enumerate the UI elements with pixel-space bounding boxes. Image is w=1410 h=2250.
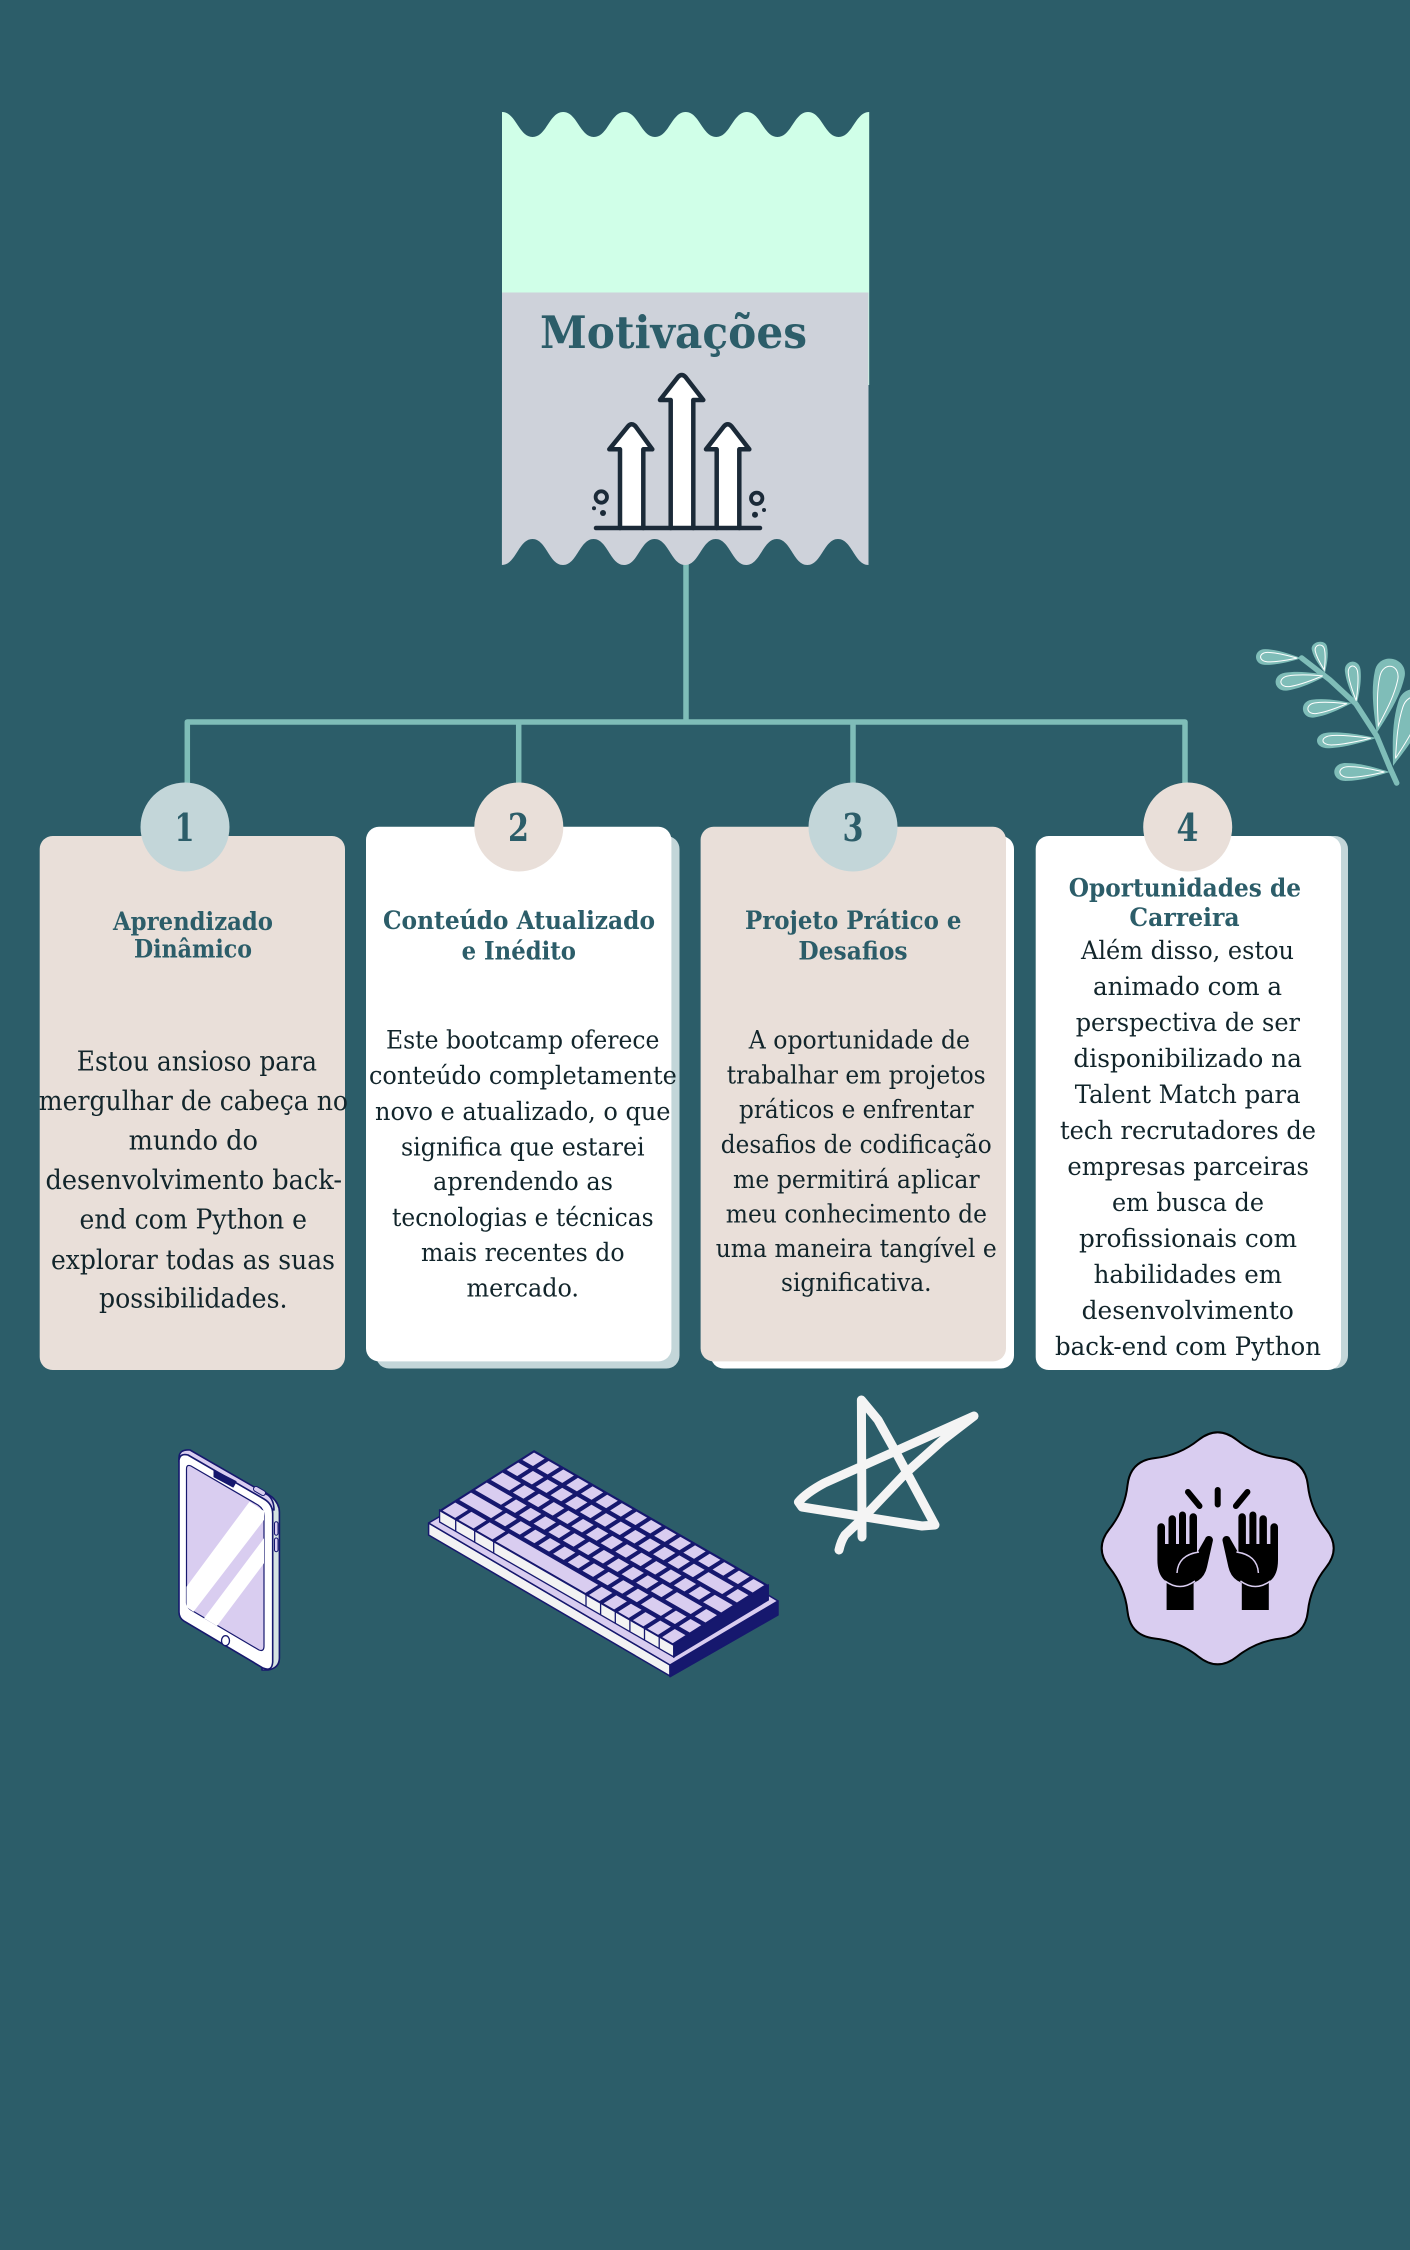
number: 4 [1176, 805, 1198, 850]
body text: desenvolvimento [1082, 1296, 1294, 1325]
base plate [429, 1458, 778, 1677]
card [1036, 836, 1341, 1370]
notch [214, 1471, 236, 1487]
body text: habilidades em [1094, 1260, 1282, 1289]
body text: tecnologias e técnicas [392, 1203, 654, 1232]
body text [369, 1026, 677, 1303]
row 5 [457, 1491, 703, 1634]
row 3 [489, 1471, 735, 1614]
body text: uma maneira tangível e [716, 1234, 997, 1263]
icon: smartphone [179, 1450, 279, 1670]
heading: Oportunidades de [1069, 873, 1301, 902]
row 6 [441, 1501, 687, 1644]
body text: conteúdo completamente [369, 1061, 677, 1090]
card [701, 827, 1006, 1361]
number badge [140, 782, 230, 872]
home button [222, 1636, 230, 1646]
heading [112, 907, 273, 964]
card shadow [376, 836, 680, 1368]
body text: desafios de codificação [721, 1130, 992, 1159]
screen [186, 1465, 264, 1650]
clap rays [1188, 1490, 1247, 1506]
right arrow [706, 424, 749, 528]
body text: significa que estarei [401, 1132, 645, 1161]
row 4 [473, 1481, 719, 1624]
icon: raised hands badge [1102, 1432, 1334, 1664]
heading: e Inédito [462, 937, 576, 966]
heading: Carreira [1129, 903, 1240, 932]
icon: keyboard [429, 1450, 778, 1677]
decorative leaf branch [1256, 640, 1410, 783]
panel 3: Projeto Prático e Desafios [701, 782, 1014, 1368]
key caps [440, 1450, 768, 1645]
row 1 [520, 1451, 766, 1594]
number badge [808, 782, 898, 872]
body text: possibilidades. [99, 1284, 288, 1315]
panel 2: Conteúdo Atualizado e Inédito [366, 782, 680, 1368]
body text: me permitirá aplicar [733, 1165, 980, 1194]
body text: em busca de [1112, 1188, 1264, 1217]
heading [745, 906, 961, 966]
title: Motivações [540, 306, 807, 359]
speaker [253, 1486, 266, 1496]
body text: perspectiva de ser [1076, 1008, 1300, 1037]
side buttons [274, 1522, 278, 1535]
side edge [262, 1490, 279, 1670]
title banner [502, 112, 869, 565]
body text: mercado. [466, 1274, 579, 1303]
banner back: mint wave [502, 112, 869, 385]
body text: significativa. [781, 1268, 932, 1297]
body text: empresas parceiras [1067, 1152, 1309, 1181]
card [40, 836, 345, 1370]
heading: Dinâmico [134, 935, 252, 964]
body text: Este bootcamp oferece [386, 1026, 659, 1055]
body text: Talent Match para [1075, 1080, 1301, 1109]
body text: disponibilizado na [1073, 1044, 1302, 1073]
key block sides [440, 1510, 768, 1657]
left hand [1157, 1512, 1213, 1610]
heading [1069, 873, 1301, 932]
body text: end com Python e [80, 1205, 307, 1236]
front face [179, 1455, 273, 1669]
center arrow [660, 375, 703, 528]
icon: rising arrows [592, 375, 766, 528]
panel 1: Aprendizado Dinâmico [39, 782, 348, 1370]
body text [716, 1026, 997, 1297]
banner front: grey wave [502, 292, 868, 565]
body text: Além disso, estou [1080, 936, 1294, 965]
body text: animado com a [1093, 972, 1282, 1001]
body text [39, 1046, 348, 1315]
body text [1055, 936, 1321, 1361]
number badge [474, 782, 563, 872]
body text: mundo do [129, 1126, 258, 1156]
row 2 [505, 1461, 750, 1604]
wavy badge [1102, 1432, 1334, 1664]
number: 1 [174, 805, 194, 850]
top edge [179, 1450, 274, 1510]
icon: hand-drawn star [798, 1400, 974, 1550]
card shadow [711, 836, 1014, 1368]
heading: Aprendizado [112, 907, 273, 936]
body text: back-end com Python [1055, 1332, 1321, 1361]
body text: meu conhecimento de [726, 1200, 987, 1229]
number badge [1143, 782, 1232, 872]
body text: práticos e enfrentar [739, 1095, 974, 1124]
body text: desenvolvimento back- [46, 1165, 342, 1196]
body text: trabalhar em projetos [727, 1060, 986, 1090]
card shadow [1045, 836, 1348, 1368]
card [366, 827, 671, 1361]
number: 2 [508, 805, 529, 850]
body text: aprendendo as [433, 1167, 613, 1196]
body text: A oportunidade de [748, 1026, 970, 1055]
heading: Projeto Prático e [745, 906, 961, 935]
heading: Conteúdo Atualizado [383, 906, 655, 935]
body text: mais recentes do [421, 1238, 625, 1267]
body text: Estou ansioso para [77, 1046, 317, 1077]
dots [596, 491, 607, 503]
number: 3 [842, 805, 864, 850]
right hand [1222, 1512, 1278, 1610]
heading: Desafios [798, 937, 908, 966]
body text: mergulhar de cabeça no [39, 1086, 348, 1117]
panel 4: Oportunidades de Carreira [1036, 782, 1348, 1370]
screen glare [186, 1502, 264, 1626]
body text: novo e atualizado, o que [375, 1097, 670, 1126]
body text: profissionais com [1079, 1224, 1297, 1253]
baseline [596, 526, 760, 530]
body text: explorar todas as suas [51, 1245, 335, 1276]
heading [383, 906, 655, 966]
connector lines [187, 560, 1185, 790]
body text: tech recrutadores de [1060, 1116, 1316, 1145]
left arrow [609, 424, 652, 528]
